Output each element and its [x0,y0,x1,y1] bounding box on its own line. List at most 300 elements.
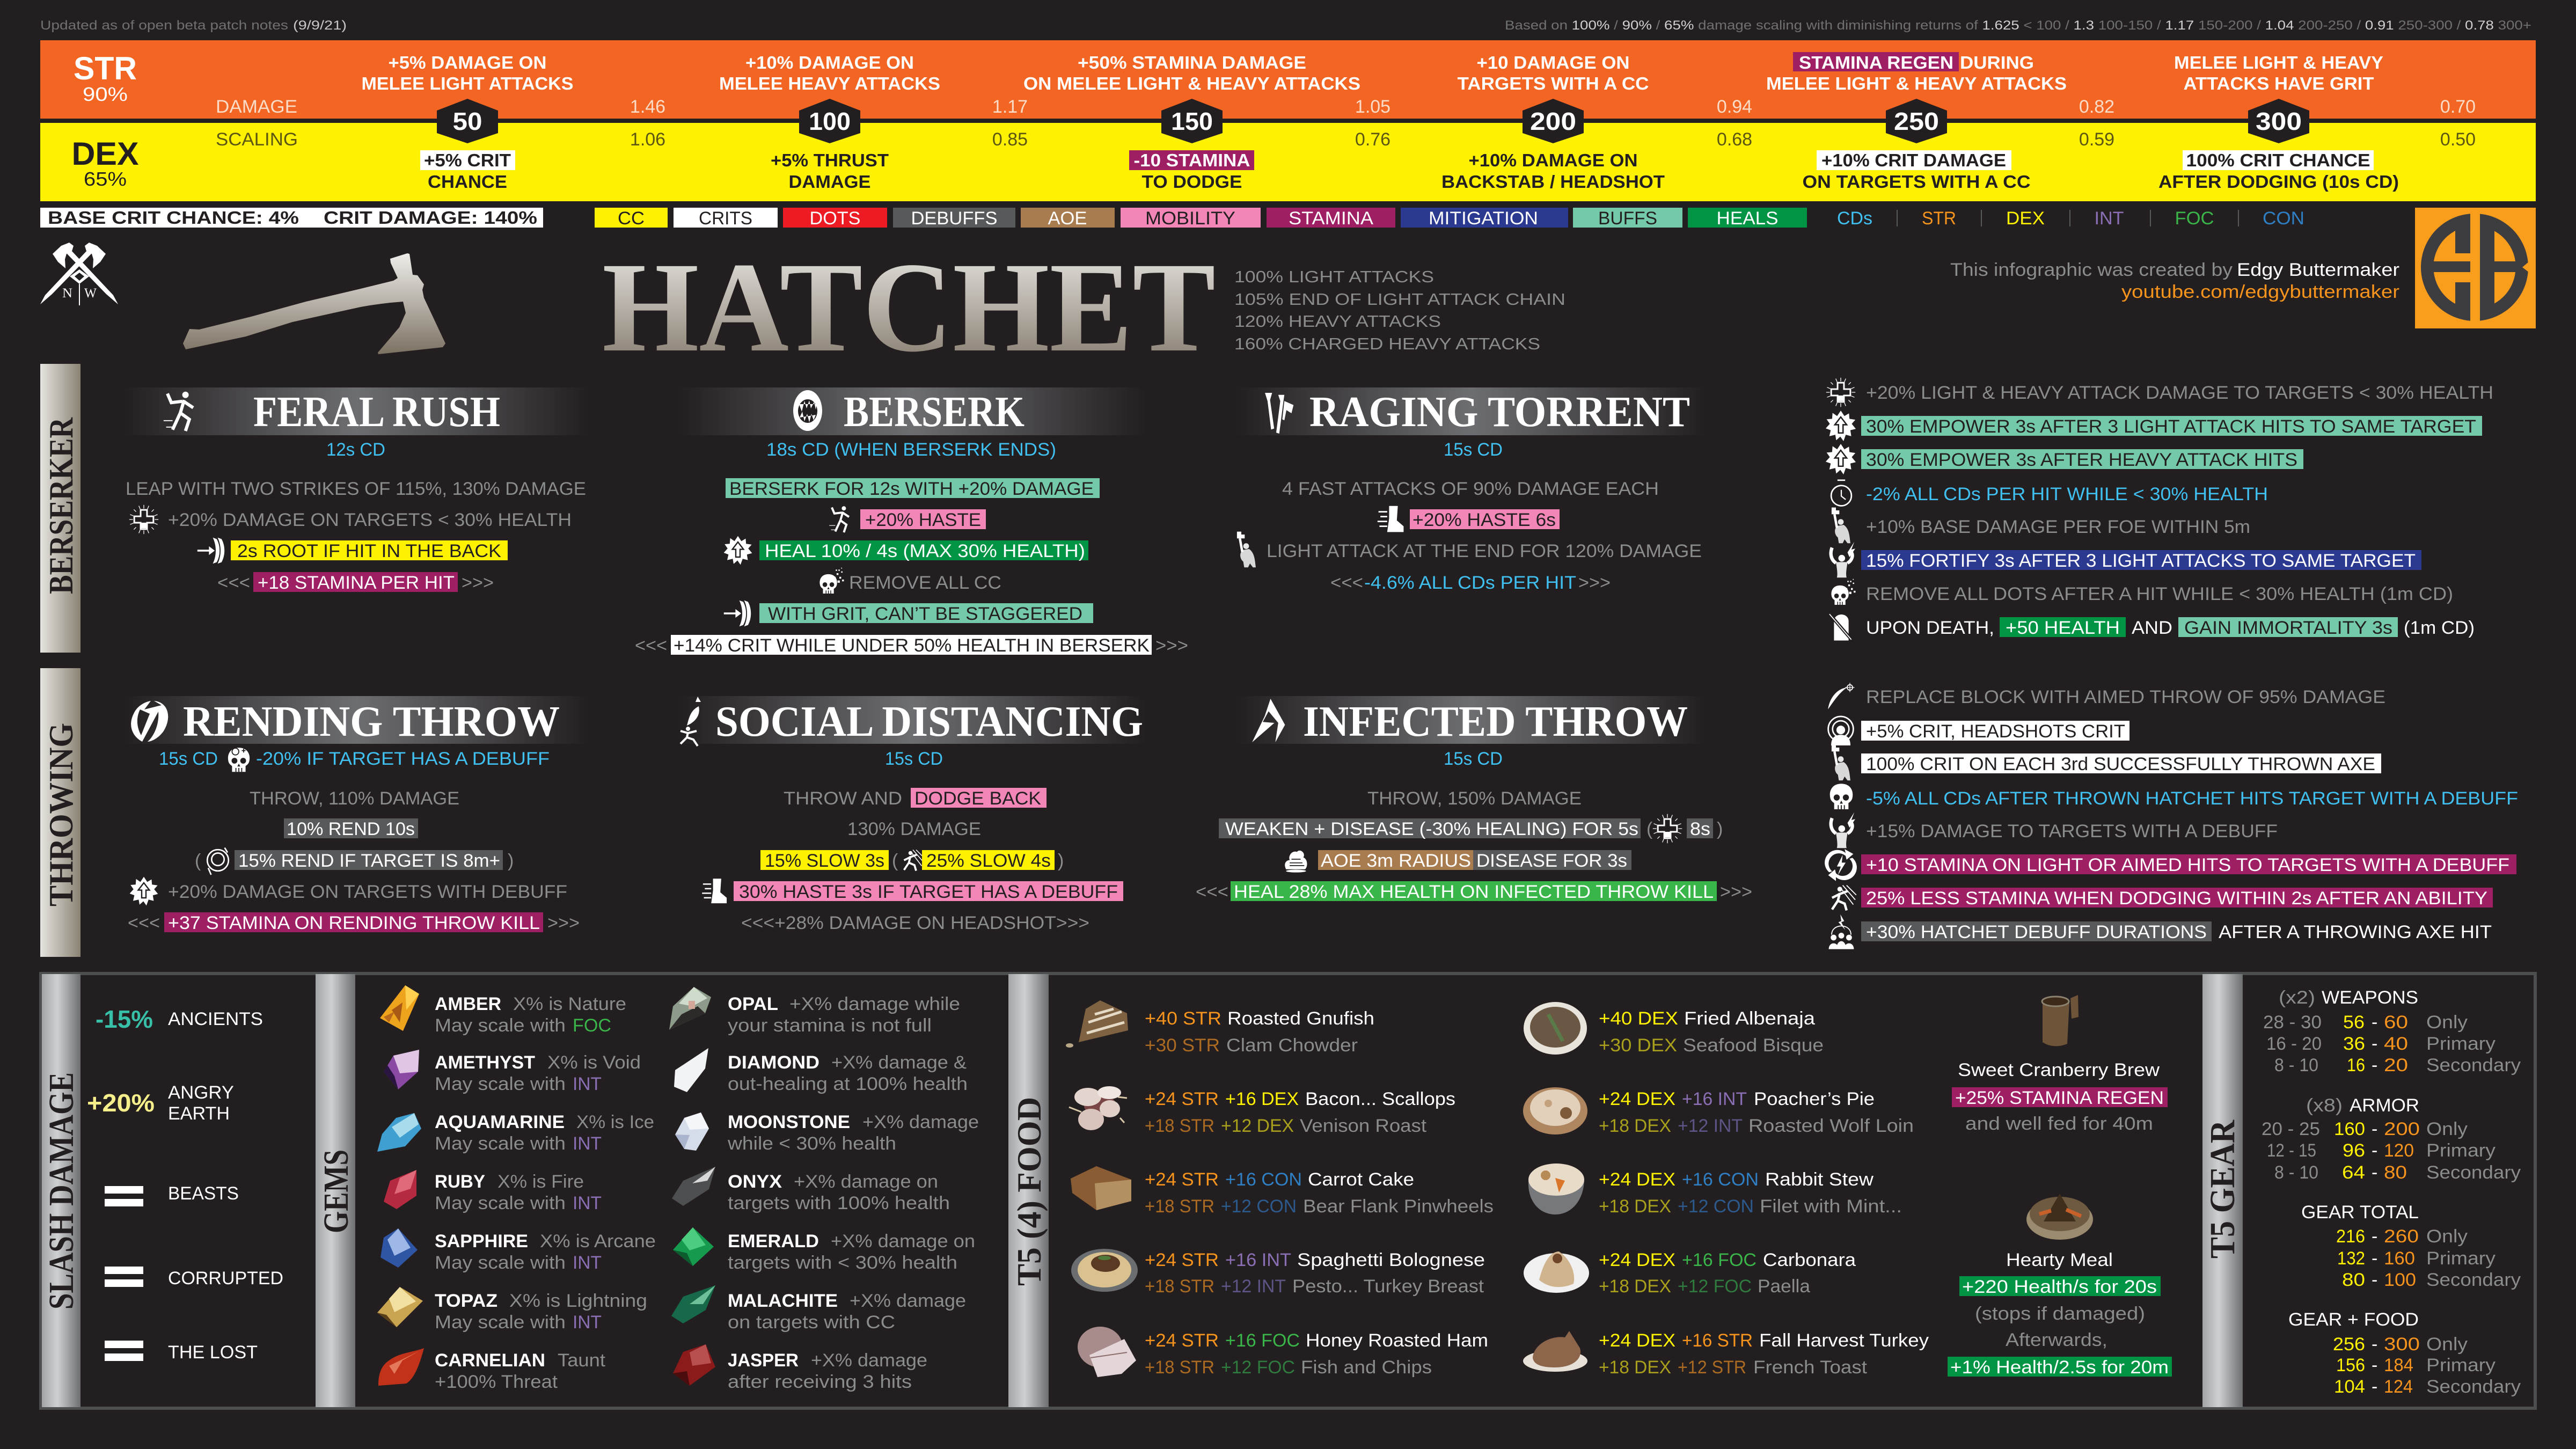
food row 3 [1145,1169,1494,1217]
stat colour legend: CON [2263,208,2304,229]
gem: malachite: +X% damage [850,1291,966,1311]
food row 10: +12 STR [1678,1357,1746,1378]
strength perks [362,52,2383,93]
cooldown: 15s CD [1444,749,1503,769]
gear total: Only [2426,1226,2468,1247]
hex markers: 100 [809,107,851,135]
description: 4 FAST ATTACKS OF 90% DAMAGE EACH [1282,479,1659,499]
gem: emerald: targets with < 30% health [728,1253,957,1273]
panel: rending throw [122,696,590,933]
food row 2: +12 DEX [1221,1116,1294,1136]
gem: onyx: targets with 100% health [728,1193,950,1213]
gear plus food: 156 [2336,1355,2365,1375]
food row 10: Fall Harvest Turkey [1759,1330,1929,1351]
DEX label: DEX [72,136,138,172]
STR label: STR [74,50,137,86]
panel: raging torrent [1235,387,1707,593]
gear total: Secondary [2426,1270,2521,1290]
gem: emerald: EMERALD [728,1231,819,1252]
gem: carnelian: Taunt [558,1350,606,1371]
passive list: UPON DEATH, [1866,618,1994,638]
dex scaling row: 0.59 [2079,129,2114,150]
passive list: 30% EMPOWER 3s AFTER 3 LIGHT ATTACK HITS TO SAME TARGET [1866,416,2476,437]
panel: gems [316,974,979,1407]
dexterity perks: AFTER DODGING (10s CD) [2158,172,2399,192]
gem: moonstone: while < 30% health [727,1133,896,1154]
creator credit: youtube.com/edgybuttermaker [2121,282,2399,302]
hex markers [437,99,2309,143]
colour legend: CC [618,208,645,229]
weapons: Primary [2426,1034,2496,1054]
gem: diamond [674,1048,968,1094]
cranberry brew: +25% STAMINA REGEN [1955,1088,2164,1108]
gem: sapphire [380,1228,656,1273]
description [702,788,1123,933]
icons [1826,378,1856,641]
heading [678,387,1145,436]
hearty meal: +1% Health/2.5s for 20m [1950,1357,2169,1378]
base crit stats: CRIT DAMAGE: 140% [324,208,537,228]
colour legend: BUFFS [1598,208,1657,229]
dexterity perks: BACKSTAB / HEADSHOT [1441,172,1665,192]
armor [2262,1095,2521,1183]
beasts: BEASTS [168,1183,239,1204]
description: >>> [547,913,580,933]
strength bar [40,40,2536,119]
gem: amethyst: X% is Void [547,1052,641,1073]
armor: 12 - 15 [2267,1140,2316,1161]
gem: aquamarine: X% is Ice [576,1112,654,1132]
description: 30% HASTE 3s IF TARGET HAS A DEBUFF [739,882,1118,902]
gear plus food: 184 [2384,1355,2413,1375]
description: LIGHT ATTACK AT THE END FOR 120% DAMAGE [1267,541,1702,561]
passive list: AFTER A THROWING AXE HIT [2219,922,2492,942]
food row 10: +16 STR [1682,1330,1753,1351]
description [1196,788,1752,902]
food row 3: +12 CON [1221,1196,1297,1217]
weapons: 28 - 30 [2263,1012,2322,1033]
armor: Primary [2426,1140,2496,1161]
passive list: -2% ALL CDs PER HIT WHILE < 30% HEALTH [1866,484,2268,504]
stat colour legend: STR [1922,208,1956,229]
gem: jasper: JASPER [728,1350,799,1371]
colour legend [595,208,1807,229]
description [1237,479,1702,593]
description: HEAL 10% / 4s (MAX 30% HEALTH) [765,541,1085,561]
passive list: +10 STAMINA ON LIGHT OR AIMED HITS TO TARGETS WITH A DEBUFF [1866,855,2509,875]
gem: opal [669,987,960,1036]
throwing section label: THROWING [42,723,80,906]
gem: opal: your stamina is not full [728,1015,932,1036]
icon: leap [164,392,193,431]
gear total: - [2372,1226,2377,1247]
heading: RAGING TORRENT [1309,389,1690,436]
icon: mouth [793,390,822,431]
gear plus food: - [2372,1355,2377,1375]
icon: carbonara [1524,1252,1589,1293]
section label [1008,974,1049,1407]
icon: carrot cake [1071,1166,1131,1210]
hearty meal: Hearty Meal [2006,1250,2113,1270]
gem: diamond: DIAMOND [728,1052,819,1073]
gem: jasper [673,1344,927,1392]
strength perks: DURING [1960,53,2034,72]
food row 10 [1599,1330,1929,1378]
damage scaling row: 0.94 [1717,97,1752,117]
armor: - [2372,1140,2377,1161]
description: HEAL 28% MAX HEALTH ON INFECTED THROW KILL [1234,882,1714,902]
food row 6: +40 DEX [1599,1008,1678,1029]
icon: three axes [1265,393,1293,434]
ancients: ANCIENTS [168,1009,263,1029]
gem: diamond: out-healing at 100% health [728,1074,968,1094]
weapons: - [2372,1034,2377,1054]
weapons: - [2372,1012,2377,1033]
weapons: 16 - 20 [2266,1034,2322,1054]
gem: sapphire: INT [573,1253,602,1273]
icon: poacher's pie [1523,1087,1587,1135]
panel: gear [2202,974,2521,1407]
food row 2: Venison Roast [1300,1116,1427,1136]
STR label [74,50,137,105]
gem: malachite: MALACHITE [728,1291,838,1311]
gem: amber: X% is Nature [513,994,626,1014]
colour legend: MITIGATION [1429,208,1538,229]
section label: GEMS [317,1150,356,1233]
beasts [105,1183,239,1206]
description: WITH GRIT, CAN’T BE STAGGERED [768,604,1082,624]
icon: rend [131,701,168,742]
food row 9: Carbonara [1763,1250,1856,1270]
attack damage list: 160% CHARGED HEAVY ATTACKS [1234,334,1540,353]
cooldown: 12s CD [326,440,385,460]
gear plus food: 300 [2384,1334,2420,1355]
hex markers: 250 [1894,107,1939,135]
passive list [1861,383,2493,638]
description: 15% REND IF TARGET IS 8m+ [238,851,500,871]
strength perks: MELEE HEAVY ATTACKS [719,74,940,93]
food row 7: +12 INT [1678,1116,1743,1136]
hex markers: 150 [1171,107,1213,135]
damage scaling row: 1.46 [630,97,665,117]
cooldown: 15s CD [885,749,943,769]
gem: malachite: on targets with CC [728,1312,895,1333]
strength perks: +10 DAMAGE ON [1477,53,1629,72]
gear plus food: 124 [2384,1377,2413,1397]
food row 7: +18 DEX [1599,1116,1671,1136]
food row 7: Roasted Wolf Loin [1748,1116,1914,1136]
colour legend: HEALS [1716,208,1779,229]
heading: BERSERK [844,389,1024,436]
panel: feral rush [122,387,590,593]
gem: aquamarine: INT [573,1133,602,1154]
icon: new world logo [40,243,118,305]
gem: aquamarine: AQUAMARINE [435,1112,565,1132]
armor: 8 - 10 [2274,1162,2318,1183]
description: <<<+28% DAMAGE ON HEADSHOT>>> [741,913,1089,933]
gem: onyx: ONYX [728,1172,782,1192]
food row 6 [1599,1008,1824,1056]
armor: - [2372,1119,2377,1139]
section label [42,974,81,1407]
description: <<< [1196,882,1228,902]
food row 8: +12 CON [1678,1196,1754,1217]
food row 4: +12 INT [1221,1276,1286,1297]
dex scaling row: 0.68 [1717,129,1752,150]
weapons: 60 [2384,1012,2408,1033]
gem: diamond: +X% damage & [831,1052,967,1073]
food row 5: +16 FOC [1225,1330,1300,1351]
panel: berserk [635,387,1188,656]
gear plus food: Secondary [2426,1377,2521,1397]
dexterity perks: +10% CRIT DAMAGE [1821,150,2006,170]
cooldown: 18s CD (WHEN BERSERK ENDS) [766,440,1056,460]
food row 3: Bear Flank Pinwheels [1303,1196,1494,1217]
weapons: 8 - 10 [2274,1055,2318,1075]
food row 1: +40 STR [1145,1008,1221,1029]
food row 8 [1599,1169,1902,1217]
gear plus food: Primary [2426,1355,2496,1375]
food row 8: +24 DEX [1599,1169,1675,1190]
section label: T5 GEAR [2203,1119,2242,1258]
berserker section label [40,364,80,653]
gear plus food: 256 [2333,1334,2365,1355]
passive list: REMOVE ALL DOTS AFTER A HIT WHILE < 30% HEALTH (1m CD) [1866,584,2453,604]
food row 3: Carrot Cake [1308,1169,1414,1190]
gear total: - [2372,1248,2377,1269]
food row 5: Honey Roasted Ham [1306,1330,1488,1351]
food row 9: +24 DEX [1599,1250,1675,1270]
hex markers: 200 [1530,107,1576,135]
damage scaling row: 0.82 [2079,97,2114,117]
panel: berserker passives [1826,378,2493,641]
cooldown: 15s CD [159,749,218,769]
gear total [2301,1202,2521,1290]
food row 2: +16 DEX [1225,1089,1299,1109]
gem: aquamarine [377,1112,654,1154]
icon: new world logo: W [84,286,97,301]
gem: topaz: May scale with [435,1312,566,1333]
patch note [40,18,347,33]
description: +20% DAMAGE ON TARGETS WITH DEBUFF [168,882,567,902]
gem: carnelian: +100% Threat [435,1372,558,1392]
food row 8: Filet with Mint... [1760,1196,1902,1217]
cranberry brew [1952,1060,2168,1134]
gem: emerald: +X% damage on [831,1231,975,1252]
passive list: -5% ALL CDs AFTER THROWN HATCHET HITS TARGET WITH A DEBUFF [1866,788,2518,809]
dex scaling row: 1.06 [630,129,665,150]
description: +18 STAMINA PER HIT [258,573,455,593]
description: +20% DAMAGE ON TARGETS < 30% HEALTH [168,510,572,530]
dex scaling row [216,129,2476,150]
passive list: +15% DAMAGE TO TARGETS WITH A DEBUFF [1866,821,2278,841]
armor: 120 [2384,1140,2414,1161]
base crit stats: BASE CRIT CHANCE: 4% [48,208,299,228]
food row 8: Rabbit Stew [1765,1169,1874,1190]
gear plus food: - [2372,1334,2377,1355]
food row 10: +24 DEX [1599,1330,1675,1351]
angry earth [87,1082,234,1124]
armor: 64 [2342,1162,2365,1183]
food row 4 [1145,1250,1485,1297]
dexterity perks: +10% DAMAGE ON [1468,150,1638,170]
description [128,788,580,933]
food row 4: +16 INT [1225,1250,1291,1270]
food row 4: +24 STR [1145,1250,1219,1270]
damage scaling row: 0.70 [2440,97,2476,117]
weapons: 56 [2343,1012,2365,1033]
heading: FERAL RUSH [253,389,500,436]
the lost: THE LOST [168,1342,258,1363]
dexterity perks: CHANCE [428,172,507,192]
gear total: Primary [2426,1248,2496,1269]
gem: carnelian: CARNELIAN [435,1350,545,1371]
strength perks: MELEE LIGHT & HEAVY [2174,53,2383,72]
gem: amethyst [384,1050,641,1094]
the lost [105,1341,258,1363]
creator credit: This infographic was created by [1950,260,2233,280]
food row 8: +18 DEX [1599,1196,1671,1217]
description: ( [195,851,201,871]
weapons: 20 [2384,1055,2408,1075]
stat colour legend: INT [2094,208,2124,229]
weapons: 36 [2343,1034,2365,1054]
dexterity perks [420,150,2399,192]
gear plus food [2288,1309,2521,1397]
weapons: (x2) [2279,987,2315,1008]
gem: moonstone: MOONSTONE [728,1112,850,1132]
gem: malachite [671,1285,966,1333]
corrupted: CORRUPTED [168,1268,283,1289]
description: THROW, 110% DAMAGE [250,788,459,809]
gem: onyx [672,1167,950,1213]
heading: RENDING THROW [183,698,560,745]
weapons: 40 [2384,1034,2408,1054]
food row 8: +16 CON [1682,1169,1759,1190]
strength perks: ATTACKS HAVE GRIT [2183,74,2374,93]
colour legend: CRITS [699,208,752,229]
description: +37 STAMINA ON RENDING THROW KILL [168,913,540,933]
armor: 20 - 25 [2262,1119,2320,1139]
gem: amber: AMBER [435,994,501,1014]
gear plus food: Only [2426,1334,2468,1355]
description: AOE 3m RADIUS [1321,851,1471,871]
food row 5: +18 STR [1145,1357,1214,1378]
icon: fall harvest turkey [1523,1331,1587,1372]
cooldown: 15s CD [1444,440,1503,460]
weapons: Only [2426,1012,2468,1033]
passive list: +5% CRIT, HEADSHOTS CRIT [1866,721,2125,742]
description: 8s [1690,819,1710,839]
icon: spaghetti [1071,1249,1138,1292]
gem: ruby: RUBY [435,1172,485,1192]
colour legend: DOTS [809,208,861,229]
corrupted [105,1267,283,1289]
food row 2: +24 STR [1145,1089,1219,1109]
gear plus food: 104 [2334,1377,2365,1397]
food row 6: Seafood Bisque [1683,1035,1824,1056]
gem: aquamarine: May scale with [435,1133,566,1154]
dexterity perks: +5% THRUST [771,150,889,170]
gem: amethyst: May scale with [435,1074,566,1094]
hearty meal: (stops if damaged) [1975,1304,2145,1324]
icon: scallops [1069,1086,1127,1130]
description: LEAP WITH TWO STRIKES OF 115%, 130% DAMAGE [126,479,586,499]
attack damage list: 100% LIGHT ATTACKS [1234,267,1434,286]
title: HATCHET [602,236,1216,378]
weapons: Secondary [2426,1055,2521,1075]
colour legend: MOBILITY [1145,208,1235,229]
gem: ruby [384,1170,602,1213]
armor: (x8) [2306,1095,2343,1116]
description: <<< [128,913,160,933]
base crit stats [40,208,543,228]
food row 1: Clam Chowder [1226,1035,1358,1056]
DEX label [72,136,138,190]
food row 1: +30 STR [1145,1035,1220,1056]
description: WEAKEN + DISEASE (-30% HEALING) FOR 5s [1225,819,1638,839]
hearty meal [1948,1250,2172,1378]
hex markers: 50 [453,107,482,135]
section label [316,974,356,1407]
weapons: WEAPONS [2322,987,2418,1008]
description: >>> [1578,573,1611,593]
description: 15% SLOW 3s [765,851,884,871]
description: ( [1646,819,1653,839]
description: ( [892,851,898,871]
gear total: 260 [2384,1226,2419,1247]
food row 2: Bacon... Scallops [1305,1089,1455,1109]
food row 9: +18 DEX [1599,1276,1671,1297]
armor: 96 [2343,1140,2365,1161]
gem: ruby: X% is Fire [497,1172,584,1192]
description: DISEASE FOR 3s [1476,851,1627,871]
description [635,478,1188,656]
dex scaling row: 0.76 [1355,129,1391,150]
strength perks: MELEE LIGHT & HEAVY ATTACKS [1766,74,2067,93]
food row 6: Fried Albenaja [1684,1008,1815,1029]
food row 3: +24 STR [1145,1169,1219,1190]
gem: emerald [673,1227,975,1273]
dexterity perks: TO DODGE [1142,172,1242,192]
armor: - [2372,1162,2377,1183]
colour legend: AOE [1048,208,1087,229]
food row 4: Pesto... Turkey Breast [1292,1276,1484,1297]
icons [1825,683,1857,949]
passive list: 30% EMPOWER 3s AFTER HEAVY ATTACK HITS [1866,450,2297,470]
description: 130% DAMAGE [847,819,981,839]
section label: T5 (4) FOOD [1010,1097,1048,1286]
heading: INFECTED THROW [1303,698,1688,745]
gem: onyx: +X% damage on [794,1172,938,1192]
dexterity perks: ON TARGETS WITH A CC [1802,172,2031,192]
cooldown: -20% IF TARGET HAS A DEBUFF [256,749,550,769]
strength perks: +50% STAMINA DAMAGE [1078,53,1306,72]
gem: jasper: +X% damage [811,1350,927,1371]
icon: cranberry brew mug [2042,995,2079,1046]
hex markers: 300 [2256,107,2302,135]
icon: hatchet [183,253,445,354]
strength perks: STAMINA REGEN [1799,53,1953,72]
description: +20% HASTE 6s [1413,510,1556,530]
description: BERSERK FOR 12s WITH +20% DAMAGE [729,479,1094,499]
food row 9: Paella [1758,1276,1810,1297]
hearty meal: Afterwards, [2006,1330,2107,1350]
description: ) [1717,819,1723,839]
damage scaling row [216,97,2476,117]
hearty meal: +220 Health/s for 20s [1962,1277,2157,1297]
food row 2 [1145,1089,1455,1136]
